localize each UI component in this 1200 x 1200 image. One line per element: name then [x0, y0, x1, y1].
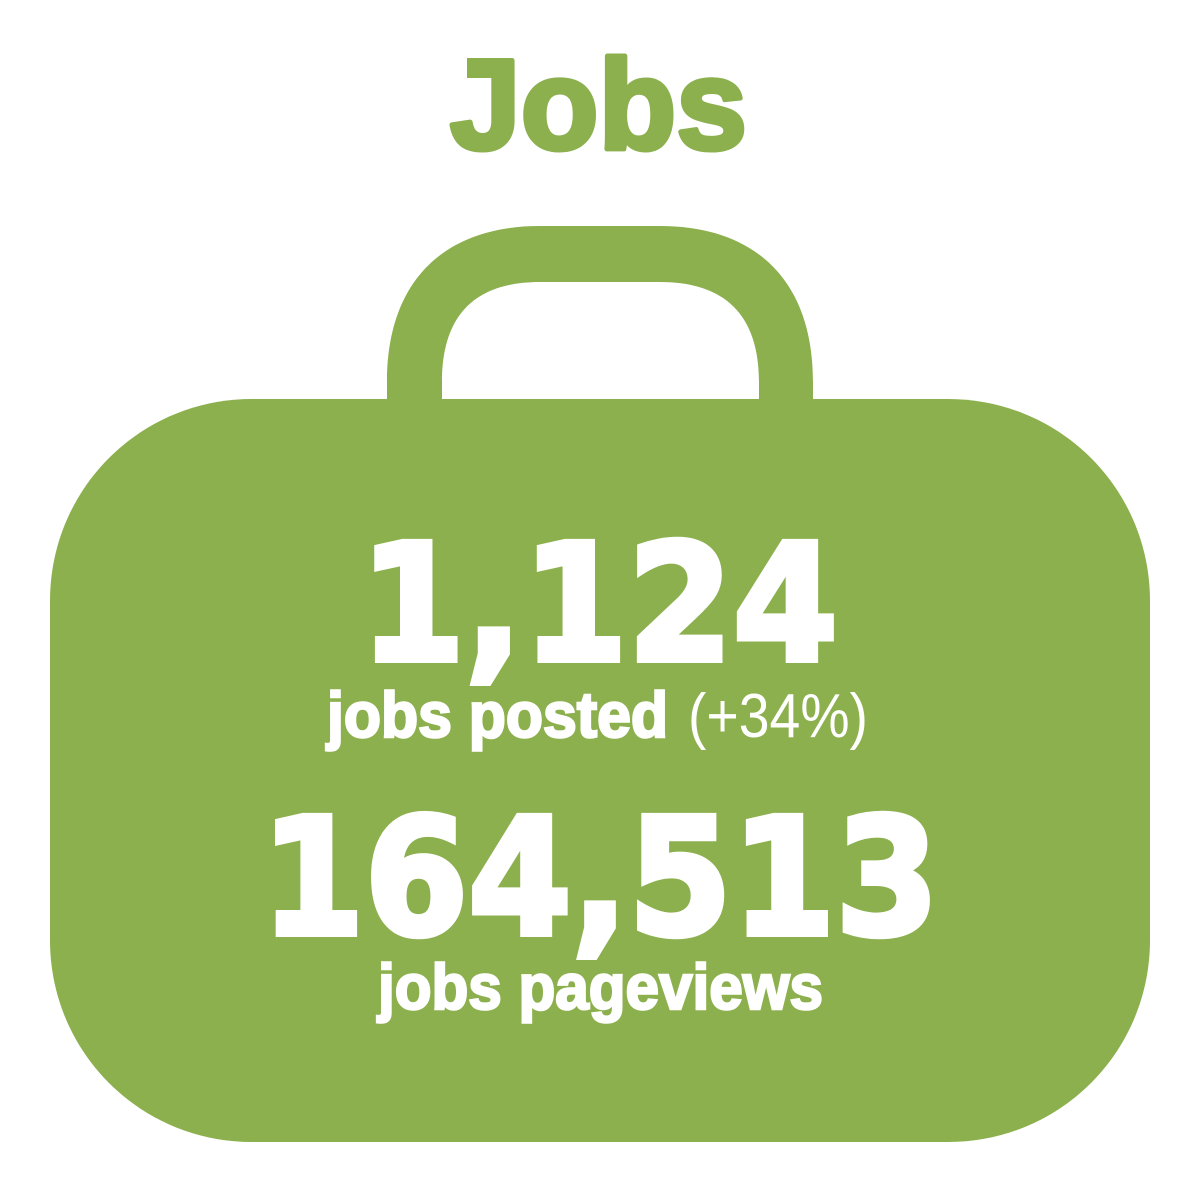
label: jobs posted: jobs posted	[326, 679, 668, 751]
title: Jobs	[450, 34, 747, 177]
number: 1,124: 1,124	[360, 511, 838, 699]
label: jobs pageviews: jobs pageviews	[377, 951, 823, 1023]
briefcase body	[50, 399, 1150, 1142]
stat: jobs posted	[326, 511, 868, 751]
label: change: (+34%)	[688, 682, 868, 751]
number: 164,513: 164,513	[261, 785, 939, 973]
briefcase handle	[387, 226, 813, 400]
icon: briefcase	[50, 226, 1150, 1142]
stat: jobs pageviews	[261, 785, 939, 1023]
